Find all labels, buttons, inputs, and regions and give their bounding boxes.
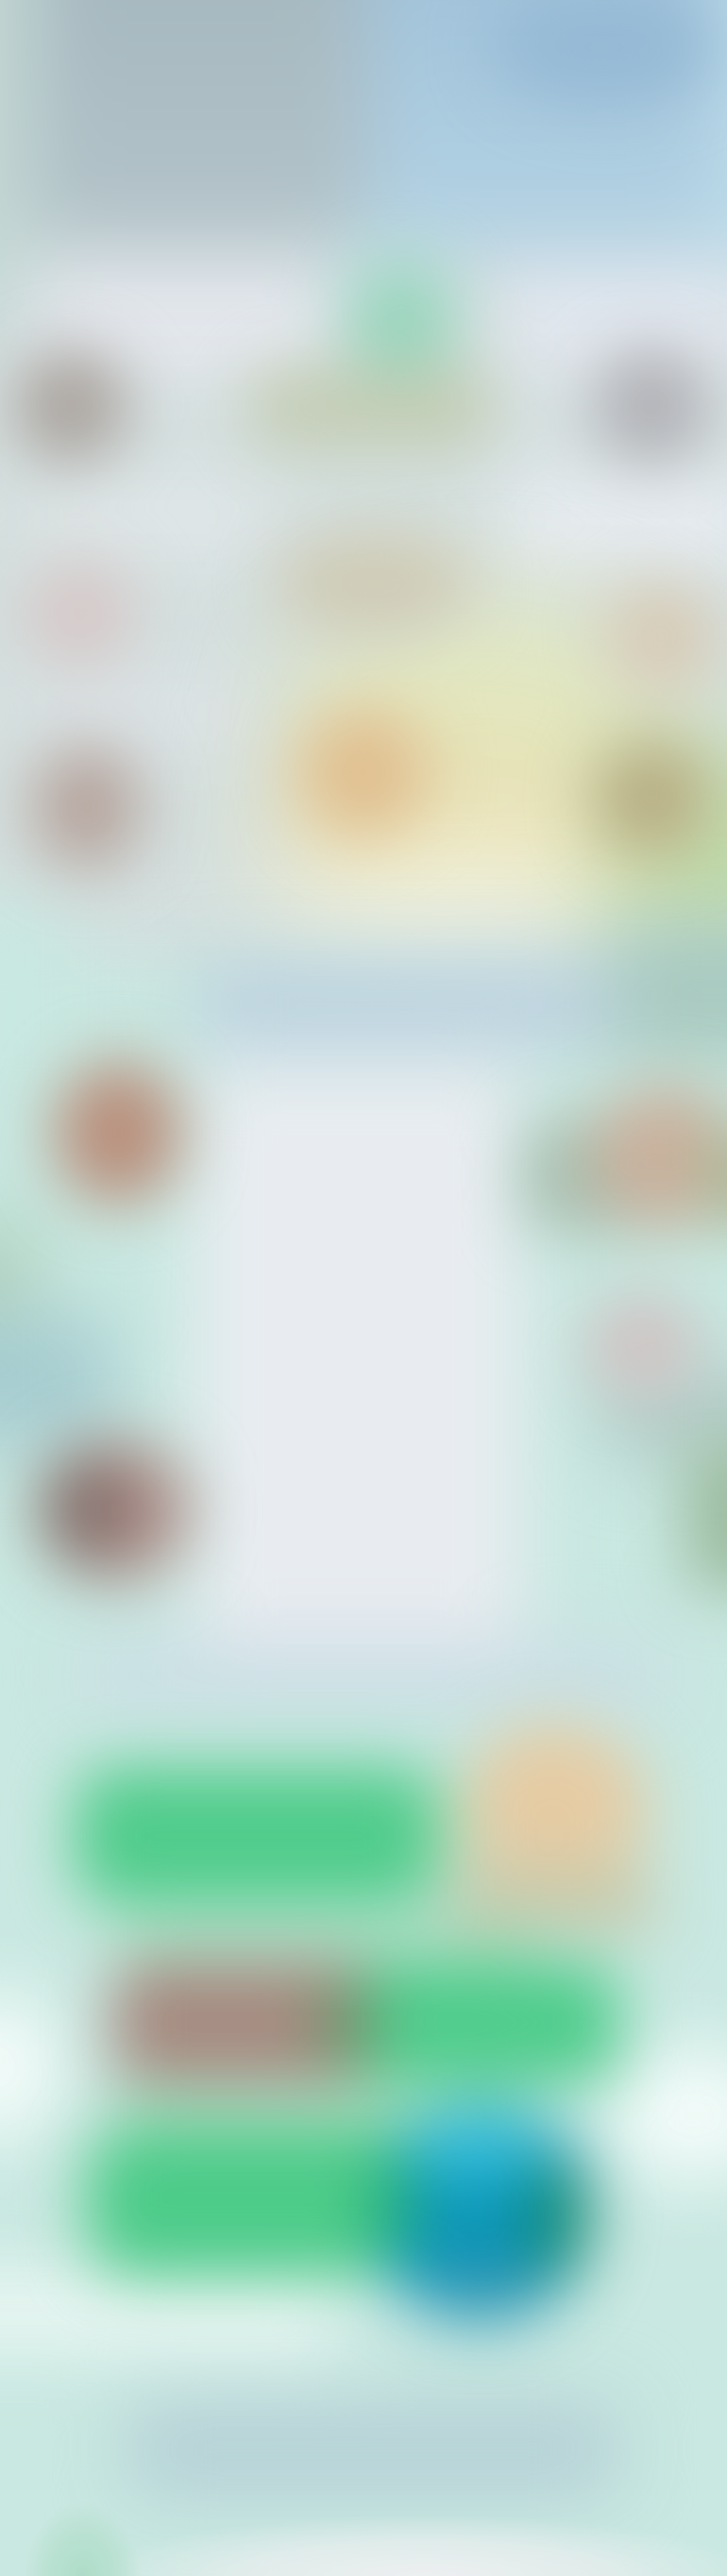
illustration: right green leaf bbox=[685, 1440, 727, 1591]
panel: right intro bbox=[500, 269, 727, 378]
wash: right lower bbox=[703, 1128, 727, 1227]
icon: brown lower circle bbox=[32, 745, 142, 869]
junction: bar overlap bbox=[311, 1989, 379, 2061]
panel: top left header bbox=[0, 0, 364, 340]
icon: brown circle bbox=[14, 349, 127, 463]
pill: brown bar bbox=[113, 1963, 368, 2081]
icon: pink circle bbox=[25, 559, 135, 668]
band: subheading bbox=[80, 1642, 666, 1709]
wash: left green teal bbox=[0, 1222, 113, 1444]
pill: first green bar bbox=[76, 1767, 439, 1905]
highlight: lower left glow bbox=[0, 2275, 340, 2346]
illustration: orange figure bbox=[299, 708, 428, 836]
section two left edge bbox=[0, 901, 66, 1147]
icon: pink right circle bbox=[585, 1293, 699, 1397]
panel: left intro bbox=[28, 269, 330, 378]
photo: brown round portrait bbox=[54, 1061, 182, 1204]
band: closing heading bbox=[127, 2402, 618, 2497]
band: green connector bbox=[118, 1921, 533, 2129]
illustration: olive figure bbox=[250, 368, 491, 448]
row text: lower left bbox=[38, 680, 255, 746]
icon: blue globe bbox=[365, 2104, 591, 2323]
background: upper section bbox=[0, 0, 727, 958]
wash: yellow green bbox=[283, 599, 680, 807]
wash: warm yellow bbox=[264, 732, 642, 901]
illustration: upper beige figure bbox=[274, 531, 472, 635]
wash: section two bottom right bbox=[614, 925, 727, 1057]
highlight: left glow bbox=[0, 1992, 66, 2143]
icon: orange bubble bbox=[444, 1723, 656, 1930]
band: section heading bbox=[198, 968, 614, 1043]
panel: top right header bbox=[330, 0, 727, 293]
wash: teal right bbox=[604, 1373, 727, 1454]
illustration: right green shape bbox=[524, 1119, 685, 1232]
pill: second green bar bbox=[321, 1963, 618, 2081]
row text: right middle bbox=[500, 472, 727, 571]
highlight: right glow bbox=[604, 2048, 727, 2180]
icon: bottom left green bbox=[24, 2426, 142, 2576]
panel: central white card bbox=[194, 1062, 524, 1652]
icon: gray circle bbox=[595, 349, 708, 463]
wash: pale footer of section bbox=[255, 859, 633, 934]
row text: left middle bbox=[38, 481, 274, 552]
photo: dark round portrait bbox=[38, 1439, 193, 1582]
wash: right green bbox=[585, 755, 727, 953]
icon: green sprout bbox=[347, 261, 456, 385]
icon: tan circle bbox=[593, 739, 710, 856]
panel: footer strip bbox=[57, 2454, 727, 2576]
pill: third green bar bbox=[87, 2129, 431, 2275]
highlight: top right blue bbox=[491, 0, 718, 104]
icon: beige circle bbox=[606, 582, 716, 692]
photo: right beige portrait bbox=[590, 1085, 727, 1228]
